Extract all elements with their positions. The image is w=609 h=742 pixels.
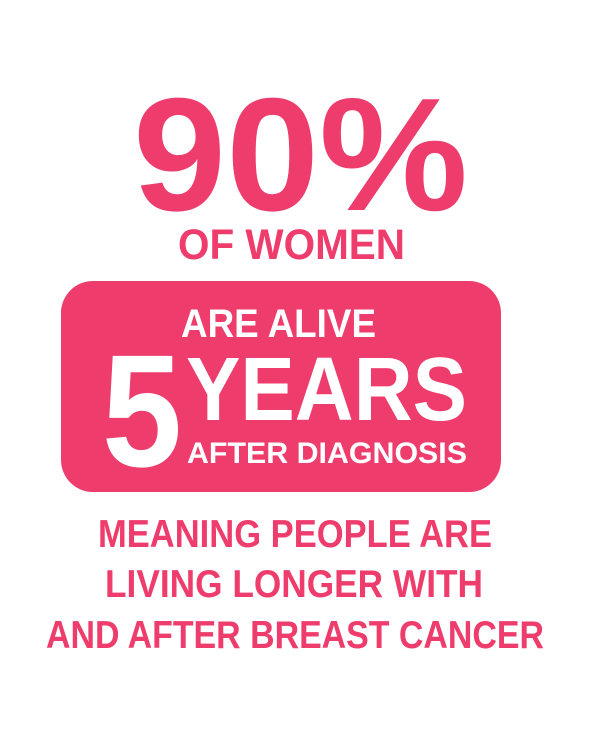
text block: meaning: AND AFTER BREAST CANCER [46, 614, 544, 657]
text: are alive: ARE ALIVE [181, 302, 376, 346]
text block: meaning: MEANING PEOPLE ARE [98, 513, 492, 556]
text: after diagnosis: AFTER DIAGNOSIS [187, 437, 467, 470]
panel: survival box [61, 281, 501, 500]
text: years: YEARS [186, 340, 467, 440]
big number 5: 5 [102, 321, 182, 500]
subheading: of women: OF WOMEN [178, 221, 405, 269]
text block: meaning [46, 513, 544, 657]
text block: meaning: LIVING LONGER WITH [105, 563, 483, 606]
headline: 90%: 90% [133, 65, 468, 245]
